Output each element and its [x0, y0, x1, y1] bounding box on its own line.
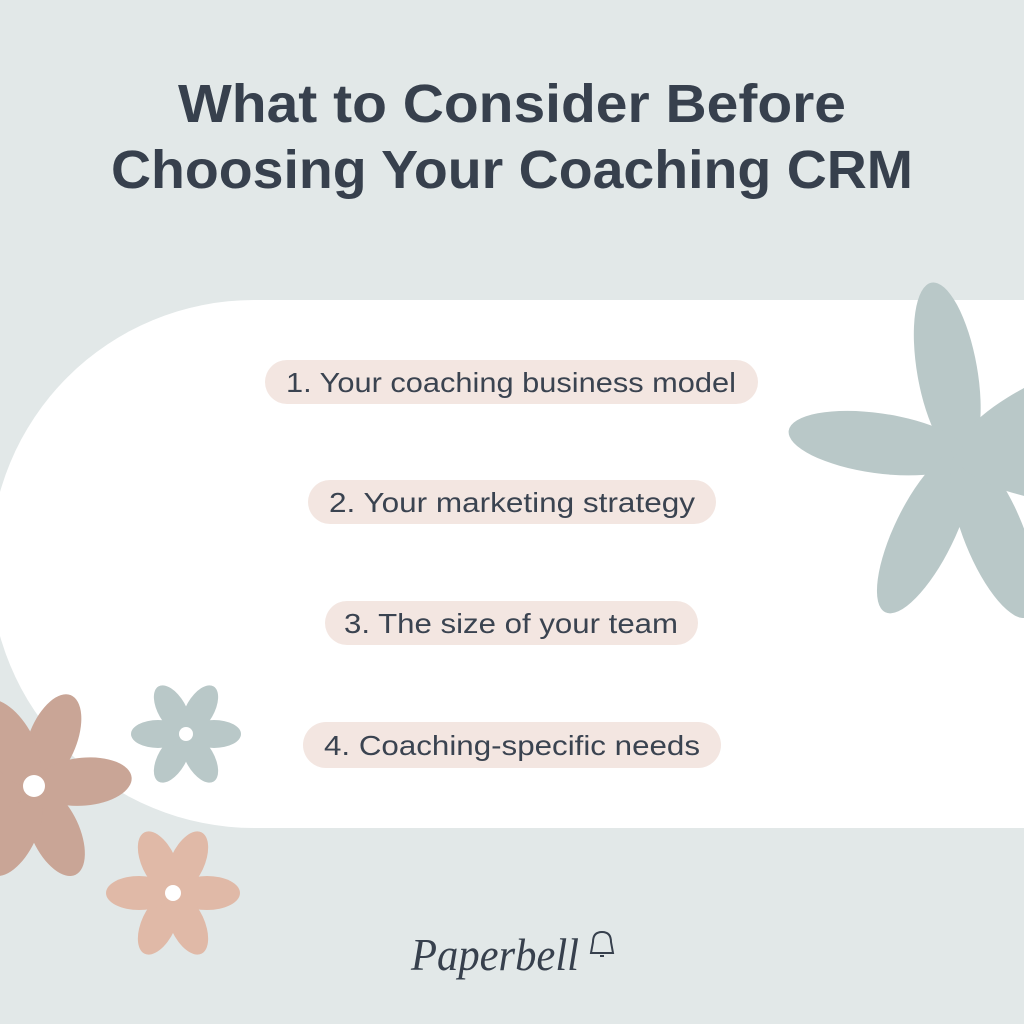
item 3: 3. The size of your team	[344, 608, 678, 639]
title	[111, 74, 913, 200]
logo: Paperbell: Paperbell	[410, 929, 579, 980]
icon: small pink flower	[106, 825, 240, 961]
icon: small blue flower	[131, 679, 241, 789]
item 1: 1. Your coaching business model	[286, 367, 736, 398]
item 2	[308, 480, 716, 524]
item 3	[325, 601, 698, 645]
icon: big pink flower	[0, 686, 134, 885]
title: Choosing Your Coaching CRM	[111, 140, 913, 200]
item 4	[303, 722, 721, 768]
icon: big blue flower	[785, 277, 1024, 628]
item 1	[265, 360, 758, 404]
list items	[265, 360, 758, 768]
panel: white stadium	[0, 300, 1024, 828]
icon: bell	[591, 932, 613, 956]
title: What to Consider Before	[178, 74, 846, 134]
item 2: 2. Your marketing strategy	[329, 487, 695, 518]
item 4: 4. Coaching-specific needs	[324, 730, 700, 761]
